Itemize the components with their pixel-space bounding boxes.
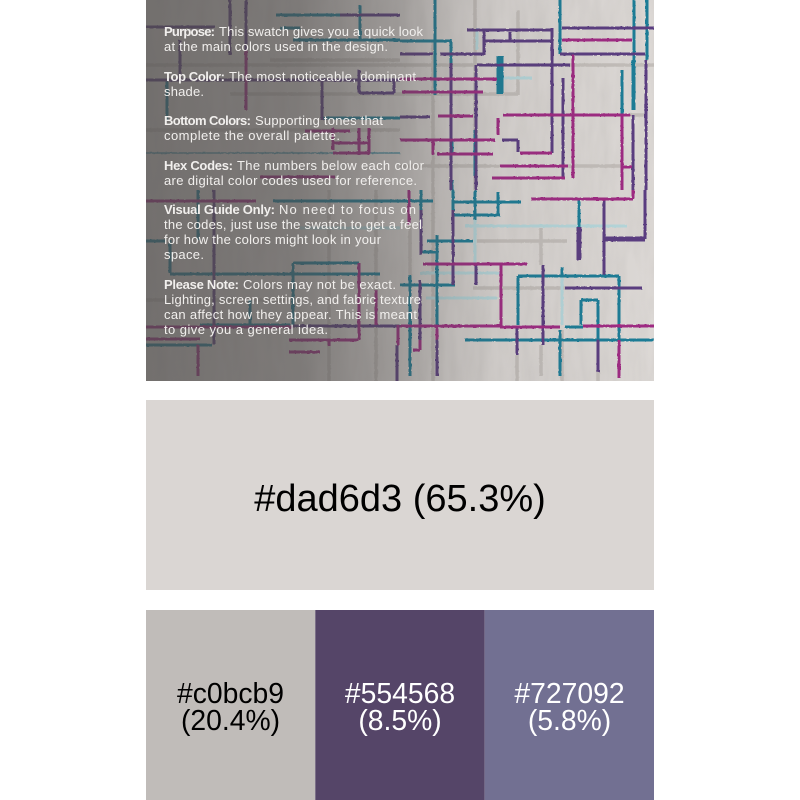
note: please note: can affect how they appear. This is meant: [164, 307, 417, 322]
note: please note: Lighting, screen settings, and fabric texture: [164, 292, 421, 307]
swatch: color 727092: #727092: [514, 677, 625, 709]
swatch: color 727092: [485, 610, 654, 800]
note: top color: Top Color:: [164, 69, 225, 84]
note: purpose: This swatch gives you a quick look: [219, 24, 424, 39]
note: purpose: at the main colors used in the design.: [164, 39, 388, 54]
swatch: color c0bcb9: #c0bcb9: [177, 677, 284, 709]
swatch: color c0bcb9: (20.4%): [181, 704, 280, 736]
swatch: dominant color: #dad6d3 (65.3%): [254, 478, 546, 520]
note: top color: The most noticeable, dominant: [229, 69, 416, 84]
note: purpose: Purpose:: [164, 24, 215, 39]
swatch: color c0bcb9: [146, 610, 315, 800]
text block: usage notes: [164, 24, 425, 337]
note: visual guide only: for how the colors might look in your: [164, 232, 382, 247]
note: hex codes: The numbers below each color: [237, 158, 425, 173]
swatch: color 727092: (5.8%): [528, 704, 611, 736]
note: top color: shade.: [164, 84, 204, 99]
swatch: color 554568: #554568: [345, 677, 455, 709]
note: visual guide only: Visual Guide Only:: [164, 202, 275, 217]
note: visual guide only: space.: [164, 247, 204, 262]
note: visual guide only: No need to focus on: [279, 202, 416, 217]
rug line pattern: [146, 0, 660, 381]
note: please note: Colors may not be exact.: [243, 277, 396, 292]
fabric texture: [538, 24, 638, 76]
note: bottom colors: complete the overall palette.: [164, 128, 340, 143]
panel: rug photo with explanatory text: [146, 0, 660, 381]
swatch: color 554568: [315, 610, 485, 800]
note: please note: Please Note:: [164, 277, 239, 292]
note: visual guide only: the codes, just use the swatch to get a feel: [164, 217, 422, 232]
swatch: dominant color: [146, 400, 654, 590]
note: hex codes: are digital color codes used for reference.: [164, 173, 417, 188]
note: please note: to give you a general idea.: [164, 322, 328, 337]
swatch: color 554568: (8.5%): [358, 704, 442, 736]
note: hex codes: Hex Codes:: [164, 158, 233, 173]
note: bottom colors: Bottom Colors:: [164, 113, 251, 128]
note: bottom colors: Supporting tones that: [255, 113, 383, 128]
dark gradient overlay: [146, 0, 558, 381]
